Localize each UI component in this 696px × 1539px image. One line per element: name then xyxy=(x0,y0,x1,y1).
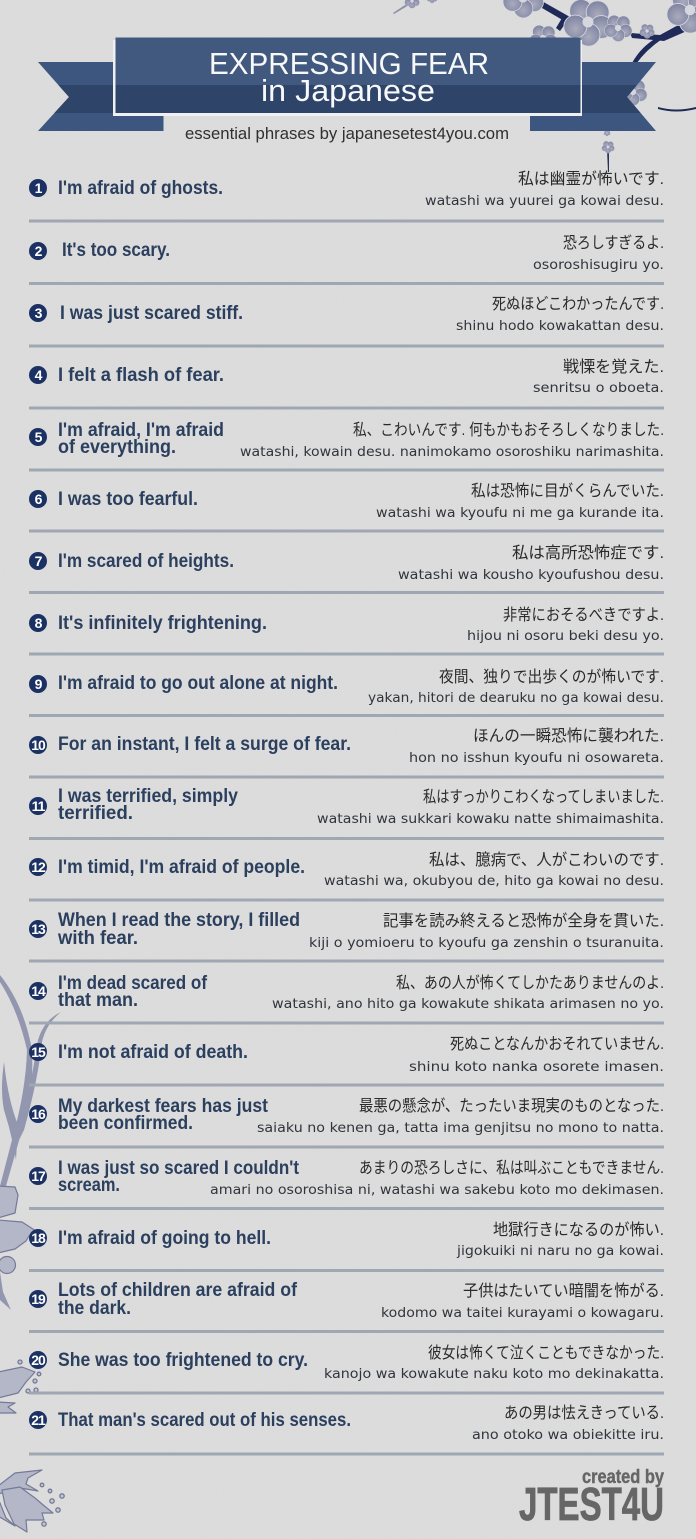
romaji 6: watashi wa kyoufu ni me ga kurande ita. xyxy=(376,506,664,521)
number 15: 15 xyxy=(31,1044,46,1060)
english phrase 14 xyxy=(58,973,208,1011)
number 12: 12 xyxy=(31,859,46,875)
banner face xyxy=(116,38,580,85)
banner lower face xyxy=(116,85,580,113)
divider 15 xyxy=(29,1084,664,1086)
number 14: 14 xyxy=(31,983,46,999)
divider 5 xyxy=(29,468,664,472)
number 2 xyxy=(29,242,47,260)
romaji 1: watashi wa yuurei ga kowai desu. xyxy=(425,194,664,209)
japanese phrase 19: 子供はたいてい暗闇を怖がる. xyxy=(463,1282,664,1300)
number 1 xyxy=(29,179,47,197)
number 5 xyxy=(29,428,47,446)
number 14 xyxy=(29,982,47,1000)
row 18 xyxy=(29,1221,664,1272)
japanese phrase 1: 私は幽霊が怖いです. xyxy=(518,170,664,188)
row 20 xyxy=(29,1344,664,1394)
decoration: top right blossom branch xyxy=(393,0,696,172)
japanese phrase 14: 私、あの人が怖くてしかたありませんのよ. xyxy=(396,974,664,992)
ribbon shadow band xyxy=(54,85,641,113)
number 10: 10 xyxy=(31,737,46,753)
number 16 xyxy=(29,1105,47,1123)
divider 6 xyxy=(29,530,664,532)
english phrase 19: Lots of children are afraid of xyxy=(58,1280,298,1301)
romaji 15: shinu koto nanka osorete imasen. xyxy=(409,1060,664,1075)
footer credit xyxy=(519,1467,664,1530)
divider 12 xyxy=(29,898,664,902)
divider 4 xyxy=(29,406,664,410)
english phrase 15: I'm not afraid of death. xyxy=(58,1042,248,1063)
decoration: bottom left flower xyxy=(0,1470,64,1532)
number 11: 11 xyxy=(32,798,46,814)
number 6 xyxy=(29,490,47,508)
english phrase 11: terrified. xyxy=(58,803,133,824)
japanese phrase 13: 記事を読み終えると恐怖が全身を貫いた. xyxy=(383,912,664,930)
row 12 xyxy=(29,851,664,902)
number 21 xyxy=(29,1411,47,1429)
row 6 xyxy=(29,482,664,532)
english phrase 10: For an instant, I felt a surge of fear. xyxy=(58,734,351,755)
divider 18 xyxy=(29,1269,664,1272)
english phrase 12: I'm timid, I'm afraid of people. xyxy=(58,857,305,878)
romaji 20: kanojo wa kowakute naku koto mo dekinakatta. xyxy=(324,1367,664,1382)
japanese phrase 16: 最悪の懸念が、たったいま現実のものとなった. xyxy=(359,1097,664,1115)
number 21: 21 xyxy=(31,1412,46,1428)
number 12 xyxy=(29,858,47,876)
number 10 xyxy=(29,736,47,754)
english phrase 9: I'm afraid to go out alone at night. xyxy=(58,673,338,694)
divider 21 xyxy=(29,1452,664,1456)
number 11 xyxy=(29,797,47,815)
romaji 5: watashi, kowain desu. nanimokamo osoroshiku narimashita. xyxy=(240,445,664,460)
english phrase 5: of everything. xyxy=(58,437,176,458)
number 3: 3 xyxy=(35,305,43,321)
decoration: left middle flower xyxy=(0,1360,41,1413)
english phrase 18: I'm afraid of going to hell. xyxy=(58,1228,271,1249)
title line 2: in Japanese xyxy=(261,73,435,108)
divider 19 xyxy=(29,1330,664,1333)
divider 16 xyxy=(29,1146,664,1148)
english phrase 5: I'm afraid, I'm afraid xyxy=(58,420,224,441)
number 9 xyxy=(29,675,47,693)
number 1: 1 xyxy=(35,180,43,196)
japanese phrase 10: ほんの一瞬恐怖に襲われた. xyxy=(473,727,664,745)
english phrase 16 xyxy=(58,1096,269,1134)
row 9 xyxy=(29,668,664,717)
divider 9 xyxy=(29,714,664,717)
divider 1 xyxy=(29,220,664,222)
divider 17 xyxy=(29,1207,664,1210)
japanese phrase 4: 戦慄を覚えた. xyxy=(563,358,664,376)
romaji 7: watashi wa kousho kyoufushou desu. xyxy=(398,568,664,583)
romaji 4: senritsu o oboeta. xyxy=(533,381,664,396)
row 14 xyxy=(29,973,664,1024)
english phrase 17: I was just so scared I couldn't xyxy=(58,1158,300,1179)
english phrase 19 xyxy=(58,1280,298,1319)
row 3 xyxy=(29,295,664,348)
romaji 16: saiaku no kenen ga, tatta ima genjitsu no mono to natta. xyxy=(257,1121,664,1136)
english phrase 11: I was terrified, simply xyxy=(58,786,238,807)
english phrase 20: She was too frightened to cry. xyxy=(58,1350,308,1371)
row 4 xyxy=(29,358,664,410)
divider 8 xyxy=(29,652,664,656)
number 7 xyxy=(29,552,47,570)
number 2: 2 xyxy=(35,243,43,259)
japanese phrase 18: 地獄行きになるのが怖い. xyxy=(493,1221,664,1239)
romaji 19: kodomo wa taitei kurayami o kowagaru. xyxy=(381,1306,664,1321)
number 7: 7 xyxy=(35,553,43,569)
number 13 xyxy=(29,920,47,938)
row 2 xyxy=(29,234,664,285)
number 3 xyxy=(29,304,47,322)
number 18: 18 xyxy=(31,1230,46,1246)
divider 3 xyxy=(29,344,664,348)
romaji 8: hijou ni osoru beki desu yo. xyxy=(467,629,664,644)
romaji 2: osoroshisugiru yo. xyxy=(533,258,664,273)
japanese phrase 15: 死ぬことなんかおそれていません. xyxy=(450,1035,664,1053)
english phrase 13: When I read the story, I filled xyxy=(58,910,300,931)
japanese phrase 8: 非常におそるべきですよ. xyxy=(503,606,664,624)
romaji 10: hon no isshun kyoufu ni osowareta. xyxy=(409,751,664,766)
row 17 xyxy=(29,1158,664,1210)
romaji 12: watashi wa, okubyou de, hito ga kowai no desu. xyxy=(324,874,664,889)
number 19 xyxy=(29,1290,47,1308)
created by: created by xyxy=(582,1467,664,1488)
number 16: 16 xyxy=(31,1106,46,1122)
number 5: 5 xyxy=(35,429,43,445)
english phrase 6: I was too fearful. xyxy=(58,489,198,510)
english phrase 17 xyxy=(58,1158,300,1196)
row 15 xyxy=(29,1035,664,1086)
row 16 xyxy=(29,1096,664,1148)
divider 10 xyxy=(29,776,664,778)
number 20 xyxy=(29,1351,47,1369)
english phrase 19: the dark. xyxy=(58,1298,131,1319)
english phrase 13: with fear. xyxy=(57,928,138,949)
number 4: 4 xyxy=(35,367,43,383)
english phrase 14: that man. xyxy=(58,990,138,1011)
divider 13 xyxy=(29,960,664,962)
number 20: 20 xyxy=(31,1352,46,1368)
english phrase 17: scream. xyxy=(58,1175,120,1196)
row 7 xyxy=(29,544,664,594)
number 13: 13 xyxy=(31,921,46,937)
english phrase 14: I'm dead scared of xyxy=(58,973,208,994)
number 18 xyxy=(29,1229,47,1247)
row 21 xyxy=(29,1404,664,1456)
divider 2 xyxy=(29,282,664,285)
japanese phrase 3: 死ぬほどこわかったんです. xyxy=(492,295,664,313)
number 8 xyxy=(29,614,47,632)
english phrase 21: That man's scared out of his senses. xyxy=(58,1410,351,1431)
number 17: 17 xyxy=(31,1168,46,1184)
number 19: 19 xyxy=(31,1291,46,1307)
row 8 xyxy=(29,606,664,656)
divider 20 xyxy=(29,1392,664,1394)
english phrase 13 xyxy=(57,910,300,949)
number 9: 9 xyxy=(35,676,43,692)
japanese phrase 12: 私は、臆病で、人がこわいのです. xyxy=(429,851,664,869)
subtitle: essential phrases by japanesetest4you.com xyxy=(185,124,509,143)
row 13 xyxy=(29,910,664,962)
romaji 13: kiji o yomioeru to kyoufu ga zenshin o tsuranuita. xyxy=(309,936,664,951)
decoration: left plant stem and leaves xyxy=(0,975,61,1310)
row 5 xyxy=(29,420,664,472)
japanese phrase 21: あの男は怯えきっている. xyxy=(504,1404,664,1422)
english phrase 2: It's too scary. xyxy=(62,240,170,261)
english phrase 16: My darkest fears has just xyxy=(58,1096,269,1117)
japanese phrase 7: 私は高所恐怖症です. xyxy=(512,544,664,562)
romaji 11: watashi wa sukkari kowaku natte shimaimashita. xyxy=(317,812,664,827)
romaji 9: yakan, hitori de dearuku no ga kowai desu. xyxy=(368,691,664,706)
japanese phrase 20: 彼女は怖くて泣くこともできなかった. xyxy=(428,1344,664,1362)
number 15 xyxy=(29,1043,47,1061)
japanese phrase 9: 夜間、独りで出歩くのが怖いです. xyxy=(439,668,664,686)
english phrase 3: I was just scared stiff. xyxy=(60,303,243,324)
row 1 xyxy=(29,170,664,222)
romaji 3: shinu hodo kowakattan desu. xyxy=(456,319,664,334)
japanese phrase 6: 私は恐怖に目がくらんでいた. xyxy=(471,482,664,500)
left ribbon tail xyxy=(38,62,164,131)
row 19 xyxy=(29,1280,664,1333)
romaji 18: jigokuiki ni naru no ga kowai. xyxy=(456,1244,664,1259)
row 10 xyxy=(29,727,664,778)
banner white outline xyxy=(113,40,582,116)
romaji 21: ano otoko wa obiekitte iru. xyxy=(472,1428,664,1443)
english phrase 5 xyxy=(58,420,224,458)
divider 7 xyxy=(29,591,664,594)
japanese phrase 2: 恐ろしすぎるよ. xyxy=(563,234,664,252)
row 11 xyxy=(29,786,664,840)
title banner xyxy=(38,38,656,131)
english phrase 7: I'm scared of heights. xyxy=(58,551,234,572)
number 17 xyxy=(29,1167,47,1185)
number 4 xyxy=(29,366,47,384)
romaji 17: amari no osoroshisa ni, watashi wa sakebu koto mo dekimasen. xyxy=(210,1183,664,1198)
romaji 14: watashi, ano hito ga kowakute shikata arimasen no yo. xyxy=(272,997,664,1012)
english phrase 8: It's infinitely frightening. xyxy=(58,613,267,634)
number 6: 6 xyxy=(35,491,43,507)
divider 11 xyxy=(29,837,664,840)
divider 14 xyxy=(29,1022,664,1024)
english phrase 11 xyxy=(58,786,238,824)
english phrase 16: been confirmed. xyxy=(58,1113,193,1134)
number 8: 8 xyxy=(35,615,43,631)
title line 1: EXPRESSING FEAR xyxy=(209,46,489,81)
english phrase 4: I felt a flash of fear. xyxy=(58,365,224,386)
right ribbon tail xyxy=(530,62,656,131)
english phrase 1: I'm afraid of ghosts. xyxy=(58,178,223,199)
